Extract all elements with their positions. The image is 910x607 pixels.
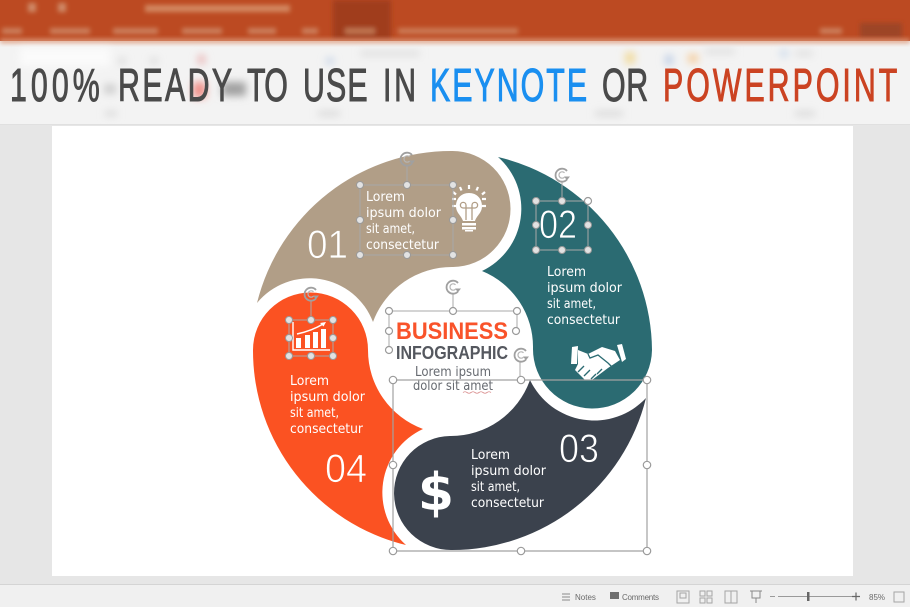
text: segment 03 body: ipsum dolor [471,464,547,479]
icon: dollar sign: $ [418,463,454,523]
text: segment 04 body: consectetur [290,422,364,437]
centre body text [413,365,493,394]
heading: POWERPOINT [663,61,897,112]
number 01: 01 [307,223,348,267]
text: segment 04 body: Lorem [290,374,329,389]
slide canvas [52,126,853,576]
text: segment 04 body: sit amet, [290,406,339,421]
heading: READY [118,61,232,112]
segment 03: dark slate [394,380,646,550]
selection handles: box around segment 03 [389,376,651,555]
number 02: 02 [539,203,577,247]
icon: bar chart [293,322,330,350]
notes button: Notes [575,593,596,602]
heading: IN [383,61,416,112]
heading: KEYNOTE [430,61,587,112]
text: segment 01 body: ipsum dolor [366,206,442,221]
selection handles: box around bulb text [356,153,456,258]
text: segment 02 body: Lorem [547,265,586,280]
title bar: blurred PowerPoint ribbon tabs [0,0,910,41]
number 03: 03 [559,427,599,471]
selection handles: box around chart icon [286,288,336,360]
text: segment 01 body: consectetur [366,238,440,253]
text: segment 01 body: Lorem [366,190,405,205]
segment 02: teal [482,157,652,409]
number 04: 04 [325,447,367,491]
selection handles: box around number 02 [532,169,592,254]
zoom slider: 85% [869,593,885,602]
centre text [396,318,508,394]
heading [10,61,897,112]
centre body text: Lorem ipsum [415,365,491,380]
segment 01: tan [257,151,511,322]
zoom slider [770,592,904,602]
view icons [677,591,762,603]
text: segment 02 body: ipsum dolor [547,281,623,296]
selection handles: box around centre text [386,281,529,380]
comments button: Comments [622,593,659,602]
heading: USE [303,61,368,112]
status bar [0,584,910,607]
segment 04: orange [253,292,423,545]
text: segment 04 body: ipsum dolor [290,390,366,405]
centre body text: dolor sit amet [413,379,493,394]
text: segment 04 body [290,374,366,437]
icon: light bulb [452,185,486,232]
text: segment 03 body: Lorem [471,448,510,463]
text: segment 02 body [547,265,623,328]
icon: handshake [571,344,626,380]
notes button [562,593,596,602]
heading: TO [247,61,288,112]
text: segment 03 body [471,448,547,511]
comments button [610,592,659,602]
text: segment 03 body: consectetur [471,496,545,511]
text: segment 01 body [366,190,442,253]
centre heading: business: BUSINESS [396,318,508,345]
ribbon toolbar (blurred) [0,39,910,125]
heading: 100% [10,61,100,112]
heading: OR [602,61,648,112]
centre heading: infographic: INFOGRAPHIC [396,342,508,363]
text: segment 02 body: consectetur [547,313,621,328]
text: segment 02 body: sit amet, [547,297,596,312]
text: segment 03 body: sit amet, [471,480,520,495]
text: segment 01 body: sit amet, [366,222,415,237]
